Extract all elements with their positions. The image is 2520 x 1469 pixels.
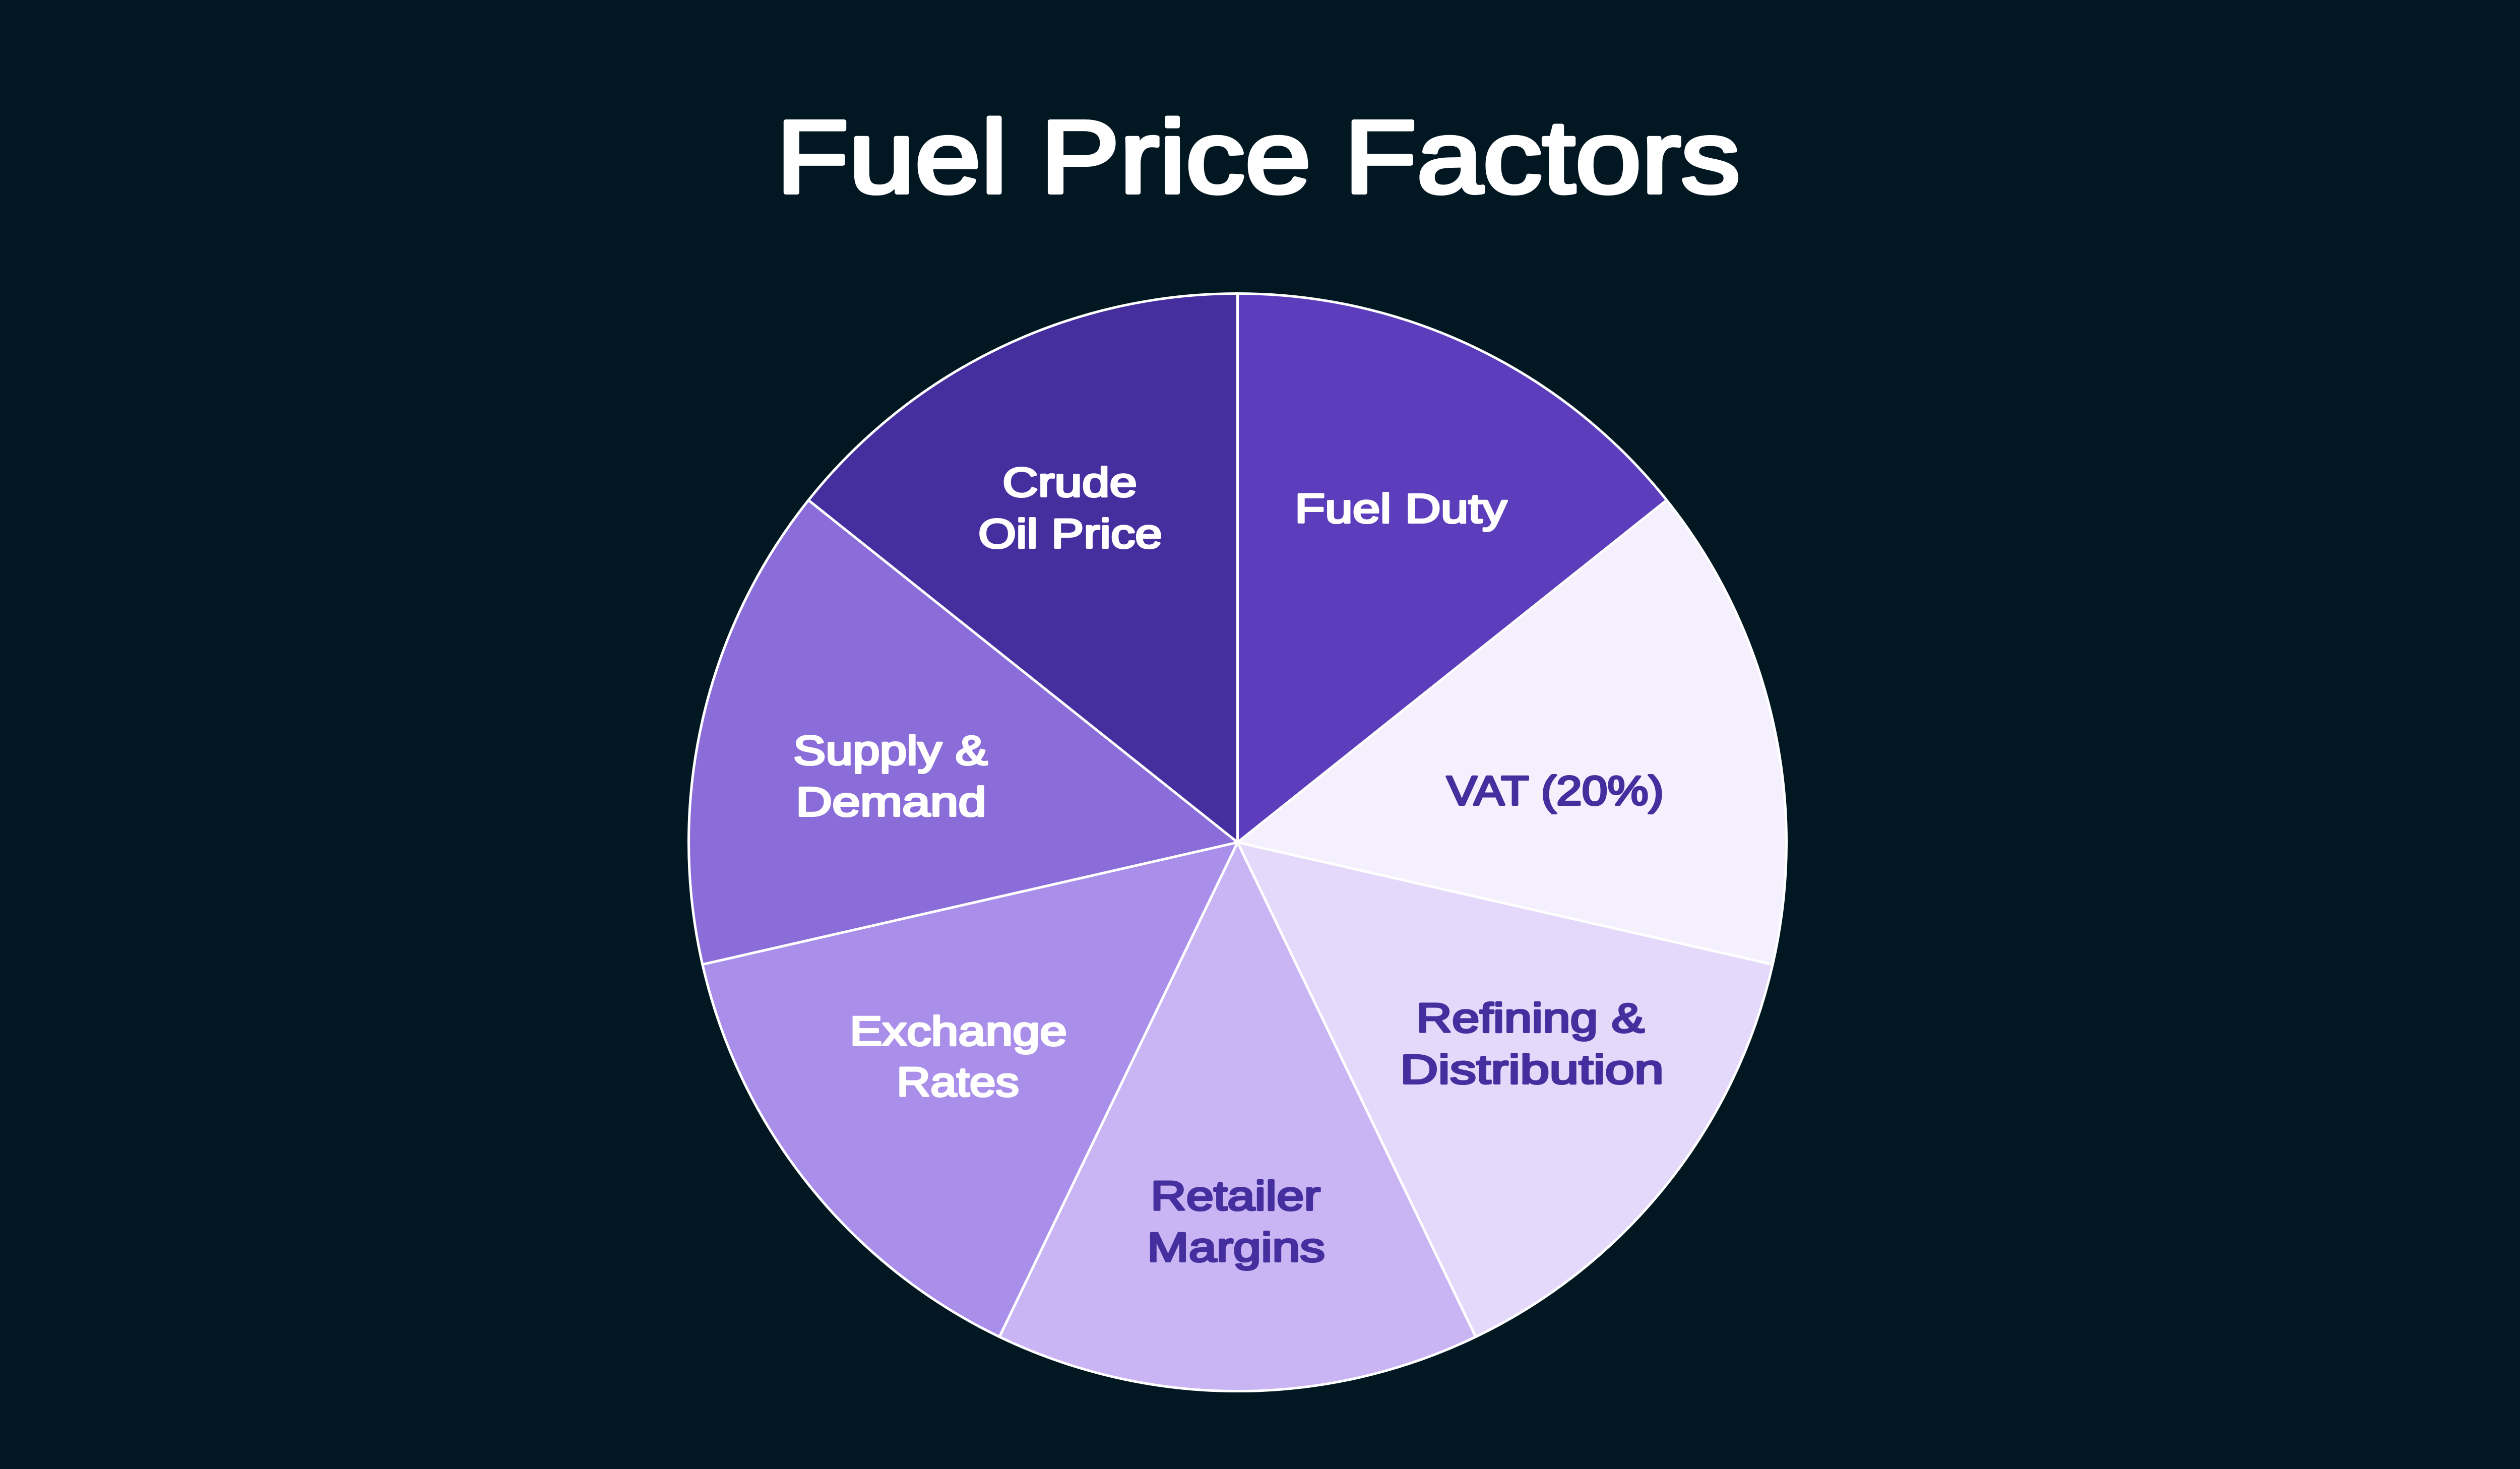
label: Crude Oil Price: Oil Price: [978, 511, 1162, 557]
label: Refining & Distribution: Refining &: [1416, 995, 1645, 1041]
label: Supply & Demand: Demand: [796, 779, 986, 825]
label: Exchange Rates: [850, 1008, 1067, 1105]
label: Crude Oil Price: [978, 460, 1162, 557]
label: Retailer Margins: Retailer: [1151, 1173, 1320, 1219]
label: Crude Oil Price: Crude: [1002, 460, 1137, 505]
slice: Supply & Demand: [689, 500, 1238, 965]
label: VAT (20%): VAT (20%): [1446, 768, 1664, 814]
pie chart: fuel price factors: [689, 293, 1786, 1391]
wedge: Fuel Duty: [1238, 293, 1667, 842]
slice: Fuel Duty: [1238, 293, 1667, 842]
slice: Retailer Margins: [999, 843, 1476, 1391]
label: Retailer Margins: Margins: [1147, 1225, 1325, 1270]
wedge: Retailer Margins: [999, 843, 1476, 1391]
slice: Refining & Distribution: [1238, 843, 1773, 1337]
wedge: VAT: [1238, 500, 1786, 965]
label: Supply & Demand: Supply &: [793, 728, 988, 774]
wedge: Exchange Rates: [703, 843, 1238, 1337]
slice: Exchange Rates: [703, 843, 1238, 1337]
wedge: Supply & Demand: [689, 500, 1238, 965]
label: Fuel Duty: Fuel Duty: [1295, 486, 1507, 532]
slice: Crude Oil Price: [808, 293, 1238, 842]
label: Retailer Margins: [1147, 1173, 1325, 1270]
label: Exchange Rates: Exchange: [850, 1008, 1067, 1054]
slice: VAT: [1238, 500, 1786, 965]
label: Refining & Distribution: Distribution: [1400, 1047, 1664, 1093]
label: Exchange Rates: Rates: [897, 1059, 1019, 1105]
wedge: Crude Oil Price: [808, 293, 1238, 842]
wedge: Refining & Distribution: [1238, 843, 1773, 1337]
title: Fuel Price Factors: [776, 99, 1740, 215]
label: Refining & Distribution: [1400, 995, 1664, 1093]
label: Supply & Demand: [793, 728, 988, 825]
